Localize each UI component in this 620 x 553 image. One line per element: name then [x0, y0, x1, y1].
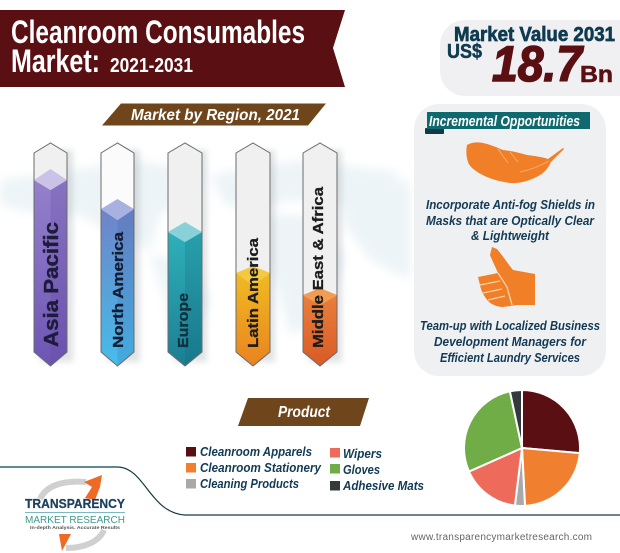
bar: Asia Pacific: Asia Pacific [41, 222, 63, 347]
legend: Cleanroom Stationery [200, 460, 322, 475]
text: anti-fog shields: Incorporate Anti-fog Shields in [426, 197, 595, 212]
market value callout: 18.7 [492, 36, 584, 92]
text: anti-fog shields [426, 197, 595, 243]
bar: North America [101, 143, 140, 366]
heading: market by region: Market by Region, 2021 [131, 107, 300, 124]
pie chart: product share [464, 390, 580, 506]
title banner: 2021-2031 [110, 55, 193, 77]
bar: Europe: Europe [175, 293, 192, 348]
heading: market by region [102, 104, 326, 126]
panel: incremental opportunities [414, 104, 606, 376]
footer curve [0, 467, 620, 515]
text: localized business: Efficient Laundry Services [440, 350, 580, 365]
text: localized business: Development Managers for [434, 334, 587, 349]
panel heading label [425, 112, 590, 134]
bar: Middle East and Africa [303, 143, 342, 366]
bar: Latin America [236, 143, 275, 366]
website url: www.transparencymarketresearch.com [410, 532, 592, 543]
world map background [0, 160, 410, 350]
bar: Latin America: Latin America [245, 237, 262, 348]
bar: Asia Pacific [34, 143, 73, 366]
heading: product: Product [278, 404, 331, 421]
legend: Adhesive Mats [342, 478, 424, 493]
market value callout: US$ [447, 41, 482, 63]
icon: feather [466, 142, 564, 183]
title banner: Market: [11, 43, 100, 79]
legend [186, 444, 424, 493]
panel heading label: Incremental Opportunities [429, 113, 580, 130]
logo [25, 475, 126, 551]
title banner [0, 10, 345, 87]
text: anti-fog shields: & Lightweight [471, 228, 550, 243]
market value callout: Bn [580, 61, 613, 87]
logo: In-depth Analysis. Accurate Results [30, 525, 121, 530]
legend: Cleaning Products [200, 476, 299, 491]
text: localized business [420, 318, 600, 365]
legend: Wipers [343, 446, 382, 461]
market value callout [440, 20, 620, 96]
text: anti-fog shields: Masks that are Optically Clear [426, 213, 595, 228]
legend: Gloves [343, 462, 380, 477]
icon: thumbs up [478, 247, 535, 307]
heading: product [238, 398, 369, 426]
logo: MARKET RESEARCH [25, 514, 125, 526]
logo: TRANSPARENCY [25, 497, 126, 511]
bar: Europe [168, 143, 207, 366]
bar: Middle East and Africa: Middle East & Africa [310, 186, 327, 348]
title banner: Cleanroom Consumables [11, 14, 305, 50]
bar: North America: North America [110, 231, 127, 348]
legend: Cleanroom Apparels [200, 444, 312, 459]
